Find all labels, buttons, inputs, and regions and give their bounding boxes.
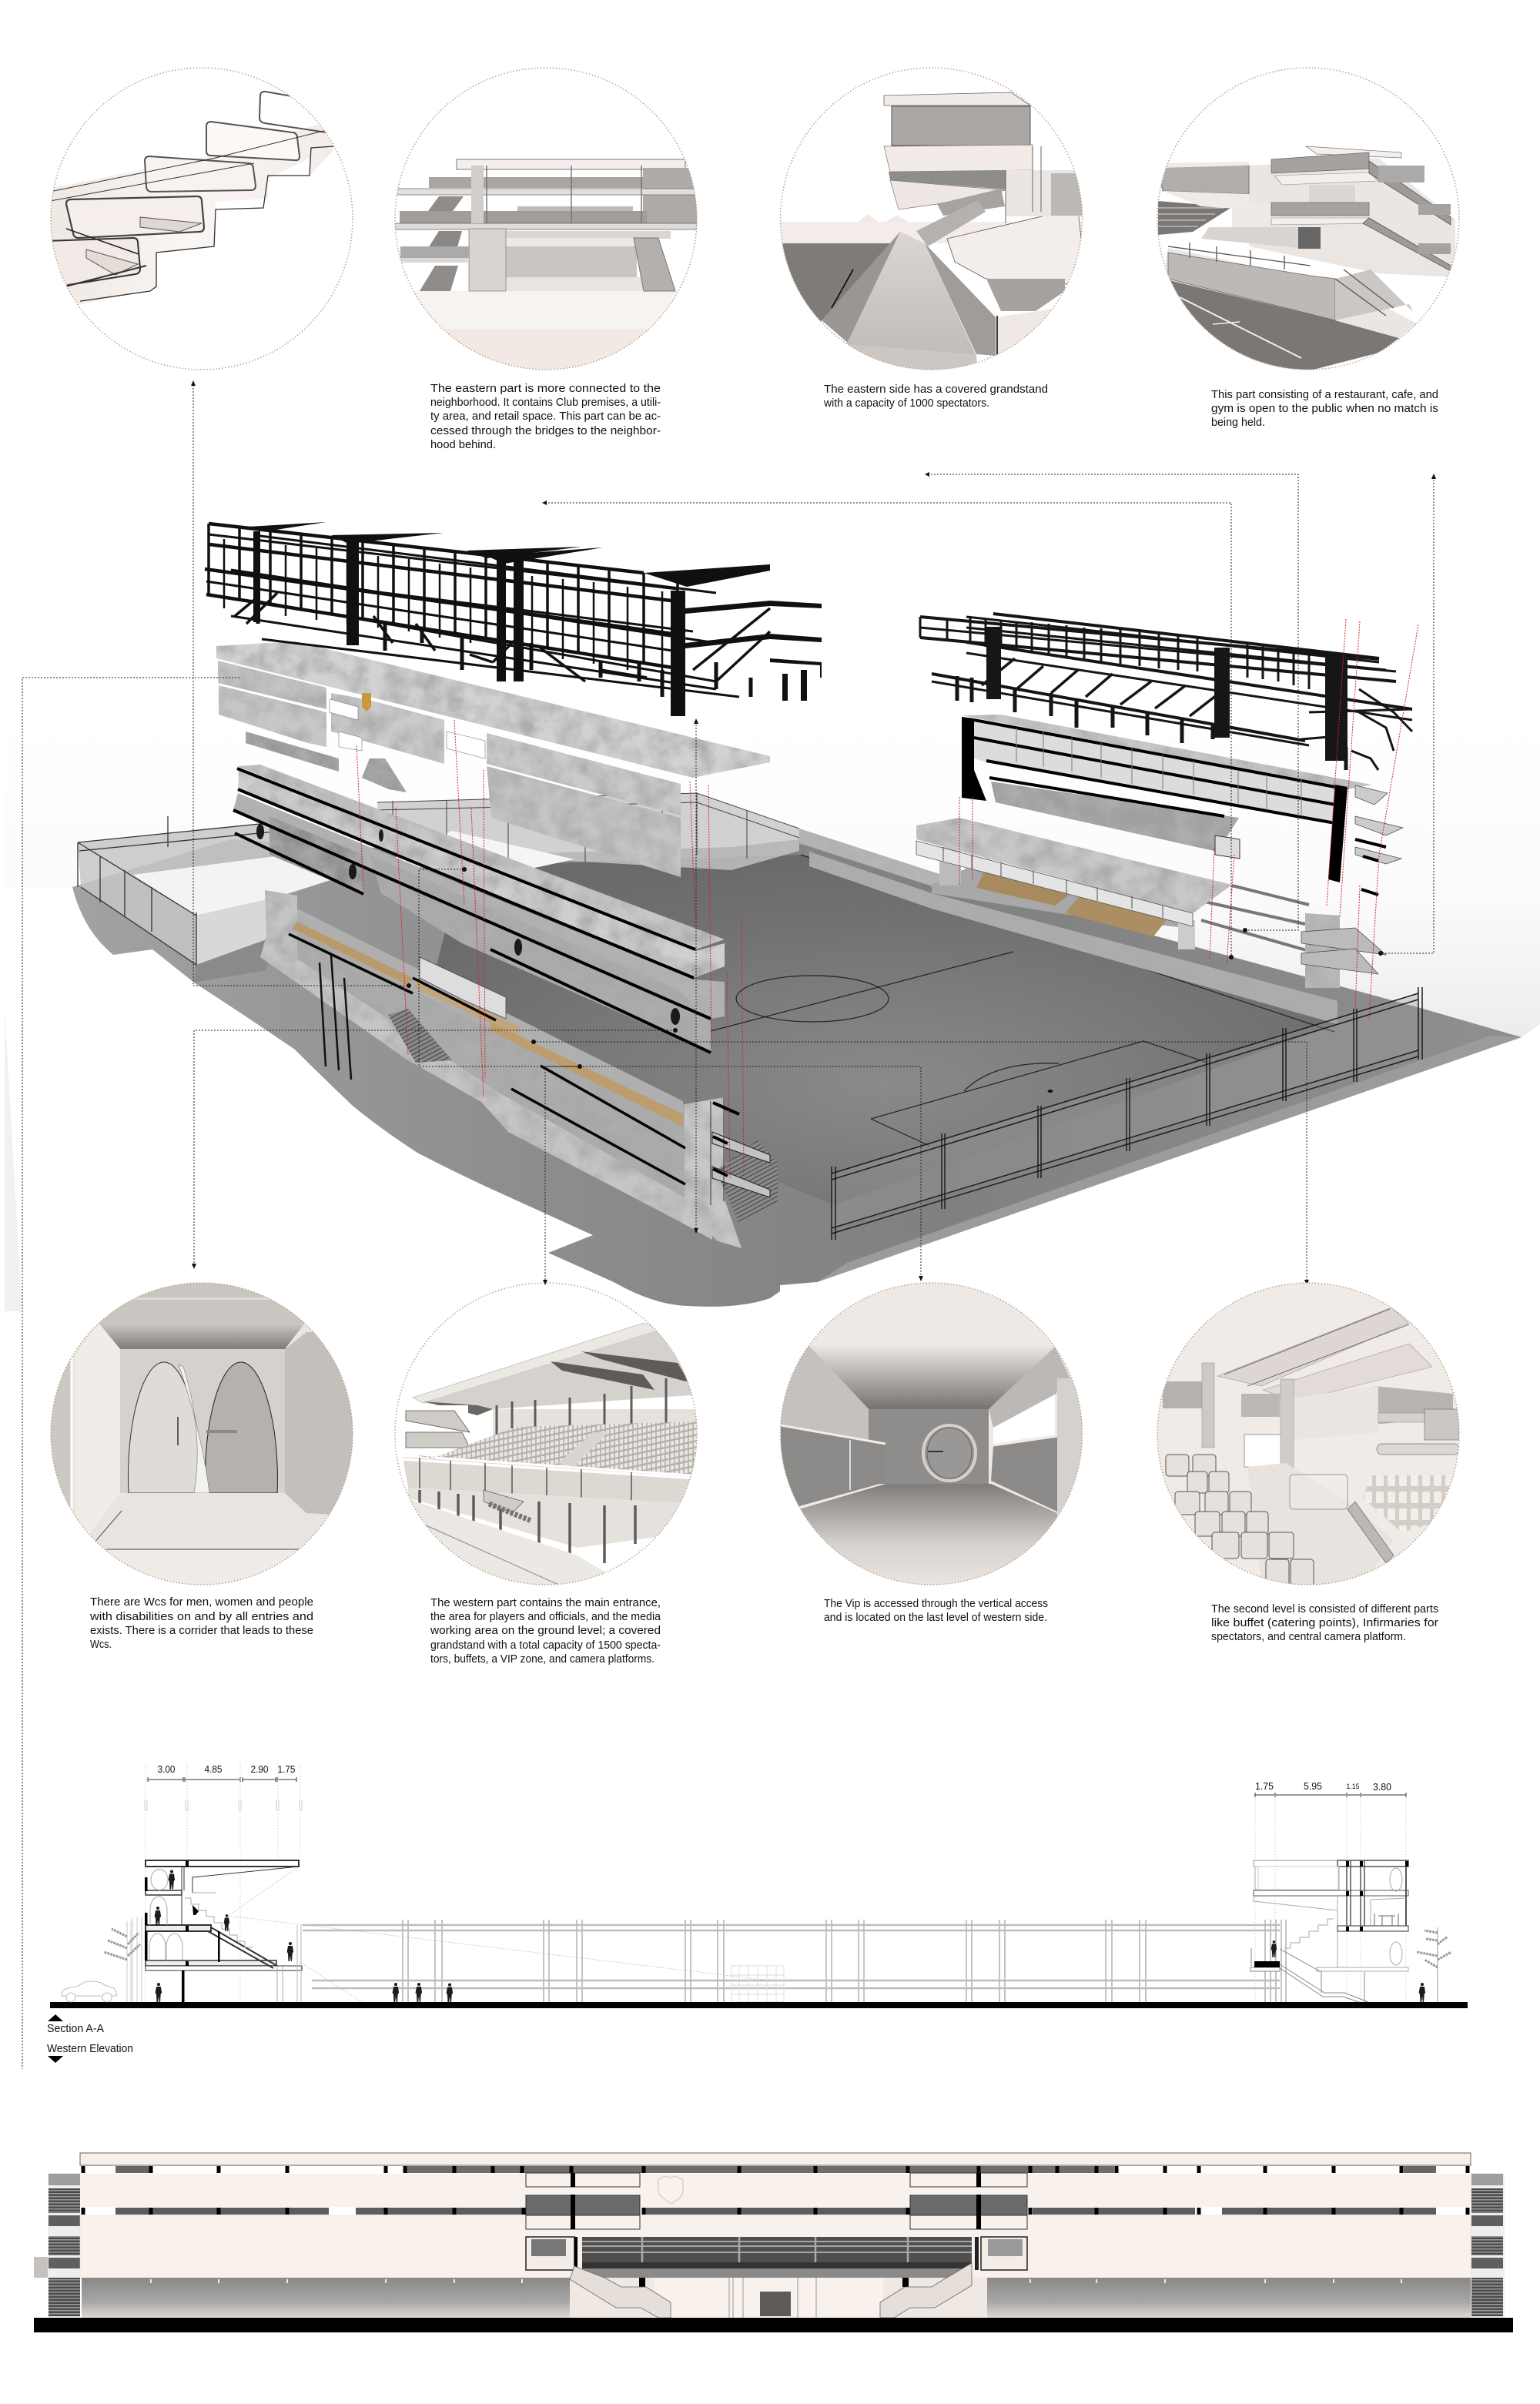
black slab edges middle level	[233, 768, 711, 1053]
section figures west	[154, 1870, 453, 2002]
east upper glazing and black frame	[962, 717, 1348, 882]
caption: eastern part: The eastern part is more connected to the	[430, 382, 661, 395]
western elevation drawing	[34, 2153, 1513, 2332]
ground floor	[82, 2278, 1471, 2318]
exploded axonometric of the stadium	[22, 380, 1522, 2069]
dimension lines east: 1.15	[1346, 1783, 1360, 1790]
east stand lower	[932, 847, 1309, 951]
caption: public part: being held.	[1211, 416, 1265, 429]
caption: eastern grandstand	[823, 383, 1048, 410]
rear enclosure fence	[377, 793, 799, 877]
caption: VIP: The Vip is accessed through the vertical access	[824, 1597, 1048, 1610]
caption: eastern part: cessed through the bridges to the neighbor-	[430, 424, 661, 437]
black cut elements west	[145, 1861, 220, 2002]
stair towers	[34, 2173, 1505, 2318]
caption: WCs: with disabilities on and by all entries and	[89, 1610, 313, 1623]
lower wall	[80, 2215, 1471, 2278]
caption: eastern part: neighborhood. It contains Club premises, a utili-	[430, 396, 661, 409]
pitch fence in section	[228, 1867, 1286, 2002]
dashed leader lines and arrows	[22, 385, 1434, 2069]
dimension lines west	[145, 1763, 302, 2002]
football pitch	[431, 855, 1337, 1205]
caption: WCs: exists. There is a corrider that leads to these	[90, 1624, 313, 1637]
caption: VIP: and is located on the last level of western side.	[824, 1611, 1047, 1624]
caption: public part: This part consisting of a restaurant, cafe, and	[1211, 388, 1438, 401]
front fence	[832, 987, 1422, 1240]
east stair tower	[1301, 785, 1403, 988]
glazing gaps west upper level	[330, 699, 485, 758]
exploded steel frame east	[920, 614, 1412, 770]
vignette: western grandstand interior	[395, 1283, 701, 1594]
dimension lines east: 5.95	[1304, 1780, 1322, 1792]
base plinth	[34, 2318, 1513, 2332]
vignette: covered grandstand view	[778, 68, 1086, 377]
section figures east	[1271, 1940, 1425, 2002]
arched openings middle level	[256, 824, 680, 1025]
western stand section	[146, 1860, 302, 2002]
label: Section A-A: Section A-A	[47, 2022, 104, 2035]
caption: western part: tors, buffets, a VIP zone, and camera platforms.	[430, 1652, 654, 1666]
concrete west upper level	[216, 641, 770, 877]
dimension lines east	[1255, 1780, 1406, 2002]
eastern stand section	[1250, 1860, 1408, 2002]
vignette: second level interior	[1155, 1278, 1463, 1594]
caption: WCs: There are Wcs for men, women and people	[90, 1595, 313, 1609]
dimension lines east: 1.75	[1255, 1780, 1274, 1792]
section A-A drawing	[50, 1763, 1468, 2008]
entrance stairs	[570, 2263, 972, 2318]
vignette: stair railing detail	[46, 68, 353, 370]
vignette: eastern part facade	[395, 68, 697, 371]
caption: second level: like buffet (catering points), Infirmaries for	[1211, 1616, 1438, 1629]
dimension lines east: 3.80	[1373, 1781, 1391, 1793]
caption: eastern part: hood behind.	[430, 438, 496, 451]
steel roof wings west	[248, 522, 822, 716]
grandstand seats west	[289, 922, 685, 1184]
vignette: restaurant cafe and gym block	[1155, 68, 1459, 370]
caption: western part	[430, 1596, 661, 1666]
dimension lines west: 2.90	[251, 1763, 268, 1775]
dimension lines west: 1.75	[277, 1763, 296, 1775]
vignette: WC corridor	[46, 1278, 354, 1594]
east stand roof	[916, 818, 1232, 913]
east stand glazing	[916, 841, 1193, 926]
ground plane	[72, 839, 1522, 1307]
caption: WCs: Wcs.	[90, 1638, 112, 1651]
central bay blocks	[526, 2173, 1027, 2229]
label: Western Elevation	[47, 2042, 133, 2063]
tree and car	[62, 1917, 142, 2002]
caption: public part	[1211, 388, 1438, 429]
concrete west stand	[260, 890, 742, 1248]
caption: eastern grandstand: The eastern side has a covered grandstand	[824, 383, 1048, 396]
caption: VIP	[824, 1597, 1048, 1624]
black cut elements east	[1254, 1861, 1408, 1967]
caption: second level: spectators, and central camera platform.	[1211, 1630, 1406, 1643]
lower window strip	[80, 2208, 1470, 2215]
label: Western Elevation: Western Elevation	[47, 2042, 133, 2055]
ground line	[50, 2002, 1468, 2008]
left enclosure fence	[78, 816, 362, 983]
caption: eastern part: ty area, and retail space. This part can be ac-	[430, 410, 661, 423]
concrete middle level west	[233, 765, 725, 1053]
concrete east upper level	[962, 715, 1371, 852]
caption: eastern grandstand: with a capacity of 1000 spectators.	[823, 397, 989, 410]
grandstand opening	[526, 2237, 1027, 2278]
east back wall	[799, 829, 1337, 1024]
goal	[732, 1966, 784, 2002]
steel columns east	[986, 627, 1348, 761]
caption: second level: The second level is consisted of different parts	[1211, 1602, 1438, 1616]
red alignment lines	[357, 619, 1418, 1178]
caption: second level	[1211, 1602, 1438, 1643]
exploded steel frame west	[205, 524, 770, 697]
caption: western part: The western part contains the main entrance,	[430, 1596, 661, 1609]
tree east	[1417, 1927, 1451, 2002]
west stairs	[388, 1009, 778, 1224]
dimension lines west: 4.85	[205, 1763, 222, 1775]
caption: WCs	[89, 1595, 313, 1651]
upper window strip	[80, 2166, 1470, 2173]
caption: western part: working area on the ground level; a covered	[430, 1624, 661, 1637]
dimension lines west: 3.00	[157, 1763, 176, 1775]
upper wall	[80, 2174, 1471, 2207]
caption: eastern part	[430, 382, 661, 451]
label: Section A-A	[47, 2014, 104, 2035]
caption: western part: grandstand with a total capacity of 1500 specta-	[430, 1639, 661, 1652]
crest outline	[658, 2176, 683, 2204]
arrow heads and anchor dots	[191, 380, 1436, 1285]
caption: western part: the area for players and officials, and the media	[430, 1610, 661, 1623]
caption: public part: gym is open to the public when no match is	[1211, 402, 1438, 415]
roof band	[80, 2153, 1471, 2165]
background haze behind the axonometric	[5, 724, 1540, 1311]
ground edge strip	[817, 1036, 1522, 1282]
crest on the west facade	[362, 693, 371, 711]
vignette: VIP room	[778, 1278, 1086, 1594]
